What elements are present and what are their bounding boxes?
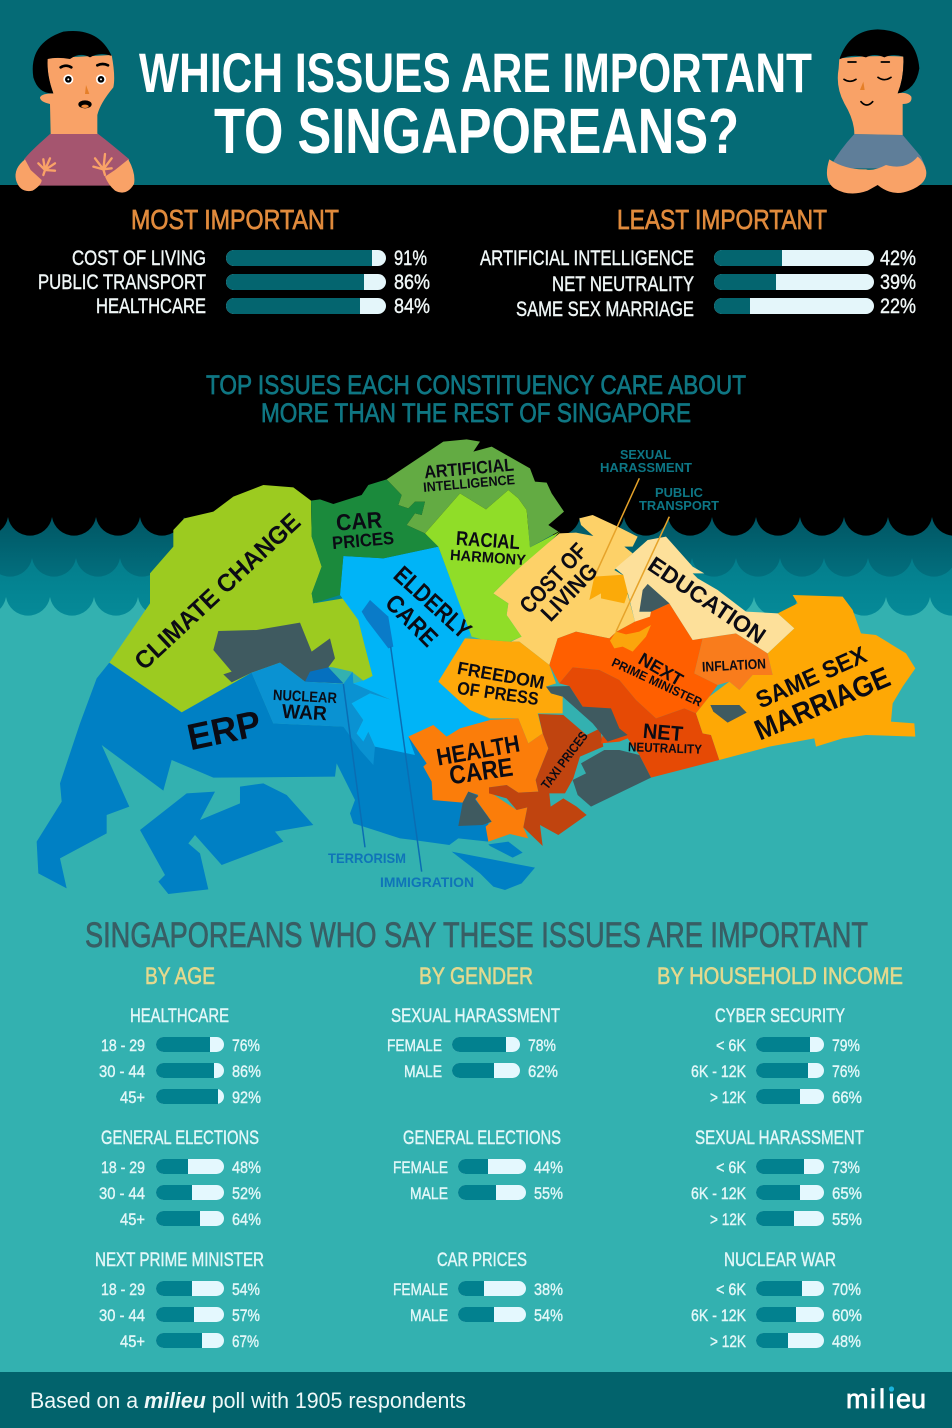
region: terrorism bbox=[305, 667, 343, 683]
bar: female 44%: 44% bbox=[534, 1158, 563, 1177]
bar: cost of living 91% bbox=[72, 247, 427, 270]
bar: male 62%: MALE bbox=[404, 1062, 442, 1081]
label: sexual harassment: HARASSMENT bbox=[600, 460, 692, 475]
bar: public transport 86% bbox=[38, 271, 430, 294]
panel: least important bbox=[480, 204, 916, 321]
region: slate near education bbox=[639, 584, 669, 612]
label: freedom of press: OF PRESS bbox=[456, 678, 540, 709]
label: net neutrality bbox=[628, 720, 703, 757]
bar: 6K-12K 60%: 6K - 12K bbox=[691, 1306, 747, 1325]
bar: male 54%: MALE bbox=[410, 1306, 448, 1325]
bar: 30-44 86%: 30 - 44 bbox=[99, 1062, 145, 1081]
panel: header bbox=[0, 0, 952, 185]
bar: cost of living 91%: COST OF LIVING bbox=[72, 247, 206, 270]
column heading: by household income: BY HOUSEHOLD INCOME bbox=[657, 963, 903, 990]
bar: 30-44 57%: 57% bbox=[232, 1306, 260, 1325]
label: net neutrality: NEUTRALITY bbox=[628, 739, 703, 757]
region: public transport bbox=[610, 625, 651, 652]
bar: 45+ 67%: 67% bbox=[232, 1332, 259, 1351]
region: inflation bbox=[694, 633, 773, 690]
bar: under 6K 79%: 79% bbox=[832, 1036, 860, 1055]
bar: 30-44 52%: 52% bbox=[232, 1184, 261, 1203]
region: immigration bbox=[362, 600, 393, 648]
label: same sex marriage: SAME SEX bbox=[752, 642, 871, 714]
bar: 45+ 92%: 92% bbox=[232, 1088, 261, 1107]
label: public transport: PUBLIC bbox=[655, 485, 704, 500]
icon: calm person bbox=[827, 29, 926, 194]
label: car prices bbox=[331, 506, 395, 553]
bar: 6K-12K 76%: 6K - 12K bbox=[691, 1062, 747, 1081]
bar: 18-29 54% bbox=[101, 1280, 260, 1299]
bar: 30-44 86% bbox=[99, 1062, 261, 1081]
block: sexual harassment: SEXUAL HARASSMENT bbox=[695, 1128, 864, 1149]
bar: over 12K 55% bbox=[710, 1210, 862, 1229]
label: net neutrality: NET bbox=[642, 720, 684, 746]
bar: 6K-12K 65%: 6K - 12K bbox=[691, 1184, 747, 1203]
label: racial harmony bbox=[449, 528, 526, 569]
label: climate change: CLIMATE CHANGE bbox=[129, 508, 306, 676]
icon: shocked person bbox=[16, 31, 134, 193]
block: sexual harassment: SEXUAL HARASSMENT bbox=[391, 1006, 560, 1027]
bar: 6K-12K 60%: 60% bbox=[832, 1306, 862, 1325]
bar: male 55%: 55% bbox=[534, 1184, 563, 1203]
bar: 45+ 67% bbox=[120, 1332, 259, 1351]
region: cost of living bbox=[493, 515, 638, 665]
bar: under 6K 73% bbox=[716, 1158, 860, 1177]
block: general elections: GENERAL ELECTIONS bbox=[403, 1128, 561, 1149]
region: freedom of press bbox=[438, 638, 563, 743]
bar: 6K-12K 60% bbox=[691, 1306, 862, 1325]
bar: female 44%: FEMALE bbox=[393, 1158, 448, 1177]
panel: by age bbox=[95, 963, 264, 1351]
label: car prices: PRICES bbox=[331, 528, 395, 553]
bar: 30-44 86%: 86% bbox=[232, 1062, 261, 1081]
region: erp bbox=[37, 663, 488, 888]
label: health care bbox=[434, 730, 522, 790]
panel: footer bbox=[0, 1372, 952, 1428]
bar: 18-29 48%: 48% bbox=[232, 1158, 261, 1177]
label: sexual harassment: SEXUAL bbox=[620, 447, 671, 462]
bar: female 44% bbox=[393, 1158, 563, 1177]
bar: 30-44 52% bbox=[99, 1184, 261, 1203]
label: public transport bbox=[639, 485, 719, 513]
region: unlabelled slate west bbox=[213, 623, 343, 683]
label: taxi prices: TAXI PRICES bbox=[538, 728, 591, 792]
leader line: sexual harassment bbox=[596, 478, 639, 573]
bar: over 12K 48% bbox=[710, 1332, 861, 1351]
bar: public transport 86%: 86% bbox=[394, 271, 430, 294]
region: net neutrality bbox=[559, 667, 719, 778]
region: nuclear war bbox=[252, 663, 392, 765]
label: terrorism: TERRORISM bbox=[328, 850, 406, 866]
label: car prices: CAR bbox=[335, 506, 383, 536]
bar: 18-29 76%: 76% bbox=[232, 1036, 260, 1055]
label: erp: ERP bbox=[184, 703, 265, 758]
bar: 6K-12K 65%: 65% bbox=[832, 1184, 862, 1203]
label: nuclear war: NUCLEAR bbox=[273, 687, 337, 707]
region: unlabelled slate centre bbox=[546, 686, 628, 742]
label: elderly care: ELDERLY bbox=[388, 561, 477, 645]
bar: under 6K 73%: < 6K bbox=[716, 1158, 747, 1177]
label: racial harmony: RACIAL bbox=[455, 528, 521, 554]
wave layer: dark bbox=[0, 500, 952, 577]
bar: male 55%: MALE bbox=[410, 1184, 448, 1203]
bar: female 38% bbox=[393, 1280, 563, 1299]
column heading: by age: BY AGE bbox=[145, 963, 215, 990]
region: erp islands bbox=[140, 783, 313, 894]
region: unlabelled slate pocket bbox=[710, 705, 747, 723]
bar: 18-29 76% bbox=[101, 1036, 260, 1055]
label: education: EDUCATION bbox=[643, 551, 771, 649]
bar: over 12K 66%: 66% bbox=[832, 1088, 862, 1107]
block: next prime minister: NEXT PRIME MINISTER bbox=[95, 1250, 264, 1271]
bar: artificial intelligence 42% bbox=[480, 247, 916, 270]
heading: top issues by constituency: MORE THAN THE REST OF SINGAPORE bbox=[261, 398, 691, 428]
region: racial harmony bbox=[425, 490, 560, 642]
block: healthcare bbox=[99, 1006, 261, 1107]
bar: over 12K 55%: > 12K bbox=[710, 1210, 747, 1229]
region: erp south island bbox=[452, 852, 535, 890]
region: sexual harassment bbox=[589, 574, 634, 603]
bar: same sex marriage 22%: SAME SEX MARRIAGE bbox=[516, 298, 694, 321]
bar: net neutrality 39%: NET NEUTRALITY bbox=[552, 273, 694, 296]
label: artificial intelligence bbox=[423, 455, 516, 495]
bar: under 6K 70% bbox=[716, 1280, 861, 1299]
region: erp south piece bbox=[488, 842, 523, 858]
label: health care: HEALTH bbox=[434, 730, 522, 772]
title bbox=[139, 41, 812, 167]
bar: healthcare 84% bbox=[96, 295, 430, 318]
bar: under 6K 73%: 73% bbox=[832, 1158, 860, 1177]
block: cyber security bbox=[691, 1006, 862, 1107]
heading: most important: MOST IMPORTANT bbox=[131, 204, 339, 235]
bar: 45+ 64%: 45+ bbox=[120, 1210, 145, 1229]
bar: net neutrality 39%: 39% bbox=[880, 271, 916, 294]
region: car prices bbox=[311, 479, 438, 603]
bar: net neutrality 39% bbox=[552, 271, 916, 296]
bar: under 6K 70%: < 6K bbox=[716, 1280, 747, 1299]
label: elderly care: CARE bbox=[379, 589, 443, 653]
bar: public transport 86%: PUBLIC TRANSPORT bbox=[38, 271, 206, 294]
panel: by household income bbox=[657, 963, 903, 1351]
bar: 18-29 54%: 54% bbox=[232, 1280, 260, 1299]
wave layer: light bbox=[0, 500, 952, 616]
block: nuclear war bbox=[691, 1250, 862, 1351]
bar: 6K-12K 76% bbox=[691, 1062, 860, 1081]
bar: male 62% bbox=[404, 1062, 558, 1081]
region: climate change bbox=[109, 485, 373, 712]
bar: over 12K 48%: > 12K bbox=[710, 1332, 747, 1351]
bar: cost of living 91%: 91% bbox=[394, 247, 427, 270]
label: next prime minister: PRIME MINISTER bbox=[609, 655, 704, 710]
bar: 30-44 52%: 30 - 44 bbox=[99, 1184, 145, 1203]
bar: under 6K 70%: 70% bbox=[832, 1280, 861, 1299]
region: same sex marriage bbox=[696, 595, 915, 760]
block: sexual harassment bbox=[387, 1006, 560, 1081]
block: healthcare: HEALTHCARE bbox=[130, 1006, 229, 1027]
bar: 18-29 54%: 18 - 29 bbox=[101, 1280, 145, 1299]
bar: 45+ 64% bbox=[120, 1210, 261, 1229]
bar: 6K-12K 65% bbox=[691, 1184, 862, 1203]
label: freedom of press bbox=[456, 658, 546, 709]
bar: same sex marriage 22%: 22% bbox=[880, 295, 916, 318]
panel: lower teal background bbox=[0, 500, 952, 1372]
panel: by gender bbox=[387, 963, 563, 1325]
bar: artificial intelligence 42%: 42% bbox=[880, 247, 916, 270]
label: nuclear war: WAR bbox=[281, 701, 328, 725]
panel: black band with scalloped edge bbox=[0, 180, 952, 536]
region: elderly care bbox=[340, 547, 490, 755]
label: inflation: INFLATION bbox=[702, 655, 766, 675]
logo: milieu: milieu bbox=[846, 1384, 926, 1414]
block: nuclear war: NUCLEAR WAR bbox=[724, 1250, 836, 1271]
bar: female 38%: 38% bbox=[534, 1280, 563, 1299]
bar: male 62%: 62% bbox=[528, 1062, 558, 1081]
column heading: by gender: BY GENDER bbox=[419, 963, 533, 990]
label: freedom of press: FREEDOM bbox=[456, 658, 546, 693]
region: taxi prices bbox=[489, 714, 603, 846]
bar: over 12K 66%: > 12K bbox=[710, 1088, 747, 1107]
bar: 45+ 64%: 64% bbox=[232, 1210, 261, 1229]
block: car prices: CAR PRICES bbox=[437, 1250, 527, 1271]
map labels bbox=[129, 447, 895, 890]
title: TO SINGAPOREANS? bbox=[214, 95, 739, 167]
block: general elections: GENERAL ELECTIONS bbox=[101, 1128, 259, 1149]
label: next prime minister: NEXT bbox=[635, 649, 687, 690]
block: cyber security: CYBER SECURITY bbox=[715, 1006, 845, 1027]
bar: 30-44 57%: 30 - 44 bbox=[99, 1306, 145, 1325]
leader line: immigration bbox=[391, 647, 422, 872]
label: same sex marriage: MARRIAGE bbox=[750, 662, 895, 747]
map of Singapore constituencies bbox=[37, 439, 915, 894]
block: general elections bbox=[99, 1128, 261, 1229]
leader line: terrorism bbox=[343, 684, 365, 847]
bar: female 38%: FEMALE bbox=[393, 1280, 448, 1299]
bar: over 12K 55%: 55% bbox=[832, 1210, 862, 1229]
bar: 45+ 92%: 45+ bbox=[120, 1088, 145, 1107]
region: education bbox=[615, 537, 794, 653]
label: artificial intelligence: INTELLIGENCE bbox=[423, 472, 516, 495]
block: car prices bbox=[393, 1250, 563, 1325]
bar: male 54% bbox=[410, 1306, 563, 1325]
bar: same sex marriage 22% bbox=[516, 295, 916, 321]
bar: artificial intelligence 42%: ARTIFICIAL INTELLIGENCE bbox=[480, 247, 694, 270]
panel: most important bbox=[38, 204, 430, 318]
block: sexual harassment bbox=[691, 1128, 864, 1229]
bar: 30-44 57% bbox=[99, 1306, 260, 1325]
label: sexual harassment bbox=[600, 447, 692, 475]
heading: least important: LEAST IMPORTANT bbox=[617, 204, 827, 235]
bar: healthcare 84%: 84% bbox=[394, 295, 430, 318]
bar: female 78% bbox=[387, 1036, 556, 1055]
leader line: public transport bbox=[616, 517, 669, 632]
heading: top issues by constituency bbox=[206, 370, 746, 428]
label: artificial intelligence: ARTIFICIAL bbox=[423, 455, 515, 482]
region: unlabelled slate east coast bbox=[573, 750, 651, 807]
label: cost of living: COST OF bbox=[514, 538, 592, 618]
source note: Based on a milieu poll with 1905 respondents bbox=[30, 1388, 466, 1413]
bar: 45+ 92% bbox=[120, 1088, 261, 1107]
bar: over 12K 48%: 48% bbox=[832, 1332, 861, 1351]
bar: female 78%: 78% bbox=[528, 1036, 556, 1055]
bar: under 6K 79% bbox=[716, 1036, 860, 1055]
label: nuclear war bbox=[273, 687, 337, 725]
bar: over 12K 66% bbox=[710, 1088, 862, 1107]
label: immigration: IMMIGRATION bbox=[380, 874, 474, 890]
bar: 18-29 48%: 18 - 29 bbox=[101, 1158, 145, 1177]
region: unlabelled slate south bbox=[458, 792, 492, 826]
region: artificial intelligence bbox=[387, 439, 564, 547]
block: next prime minister bbox=[95, 1250, 264, 1351]
label: health care: CARE bbox=[447, 752, 515, 790]
bar: healthcare 84%: HEALTHCARE bbox=[96, 295, 206, 318]
label: public transport: TRANSPORT bbox=[639, 498, 719, 513]
label: cost of living: LIVING bbox=[535, 558, 603, 626]
bar: male 55% bbox=[410, 1184, 563, 1203]
block: general elections bbox=[393, 1128, 563, 1203]
label: racial harmony: HARMONY bbox=[449, 547, 526, 569]
bar: female 78%: FEMALE bbox=[387, 1036, 442, 1055]
bar: 18-29 76%: 18 - 29 bbox=[101, 1036, 145, 1055]
bar: 6K-12K 76%: 76% bbox=[832, 1062, 860, 1081]
heading: top issues by constituency: TOP ISSUES EACH CONSTITUENCY CARE ABOUT bbox=[206, 370, 746, 400]
bar: 45+ 67%: 45+ bbox=[120, 1332, 145, 1351]
bar: under 6K 79%: < 6K bbox=[716, 1036, 747, 1055]
bar: male 54%: 54% bbox=[534, 1306, 563, 1325]
region: health care bbox=[408, 718, 548, 842]
bar: 18-29 48% bbox=[101, 1158, 261, 1177]
region: next prime minister bbox=[549, 603, 718, 718]
